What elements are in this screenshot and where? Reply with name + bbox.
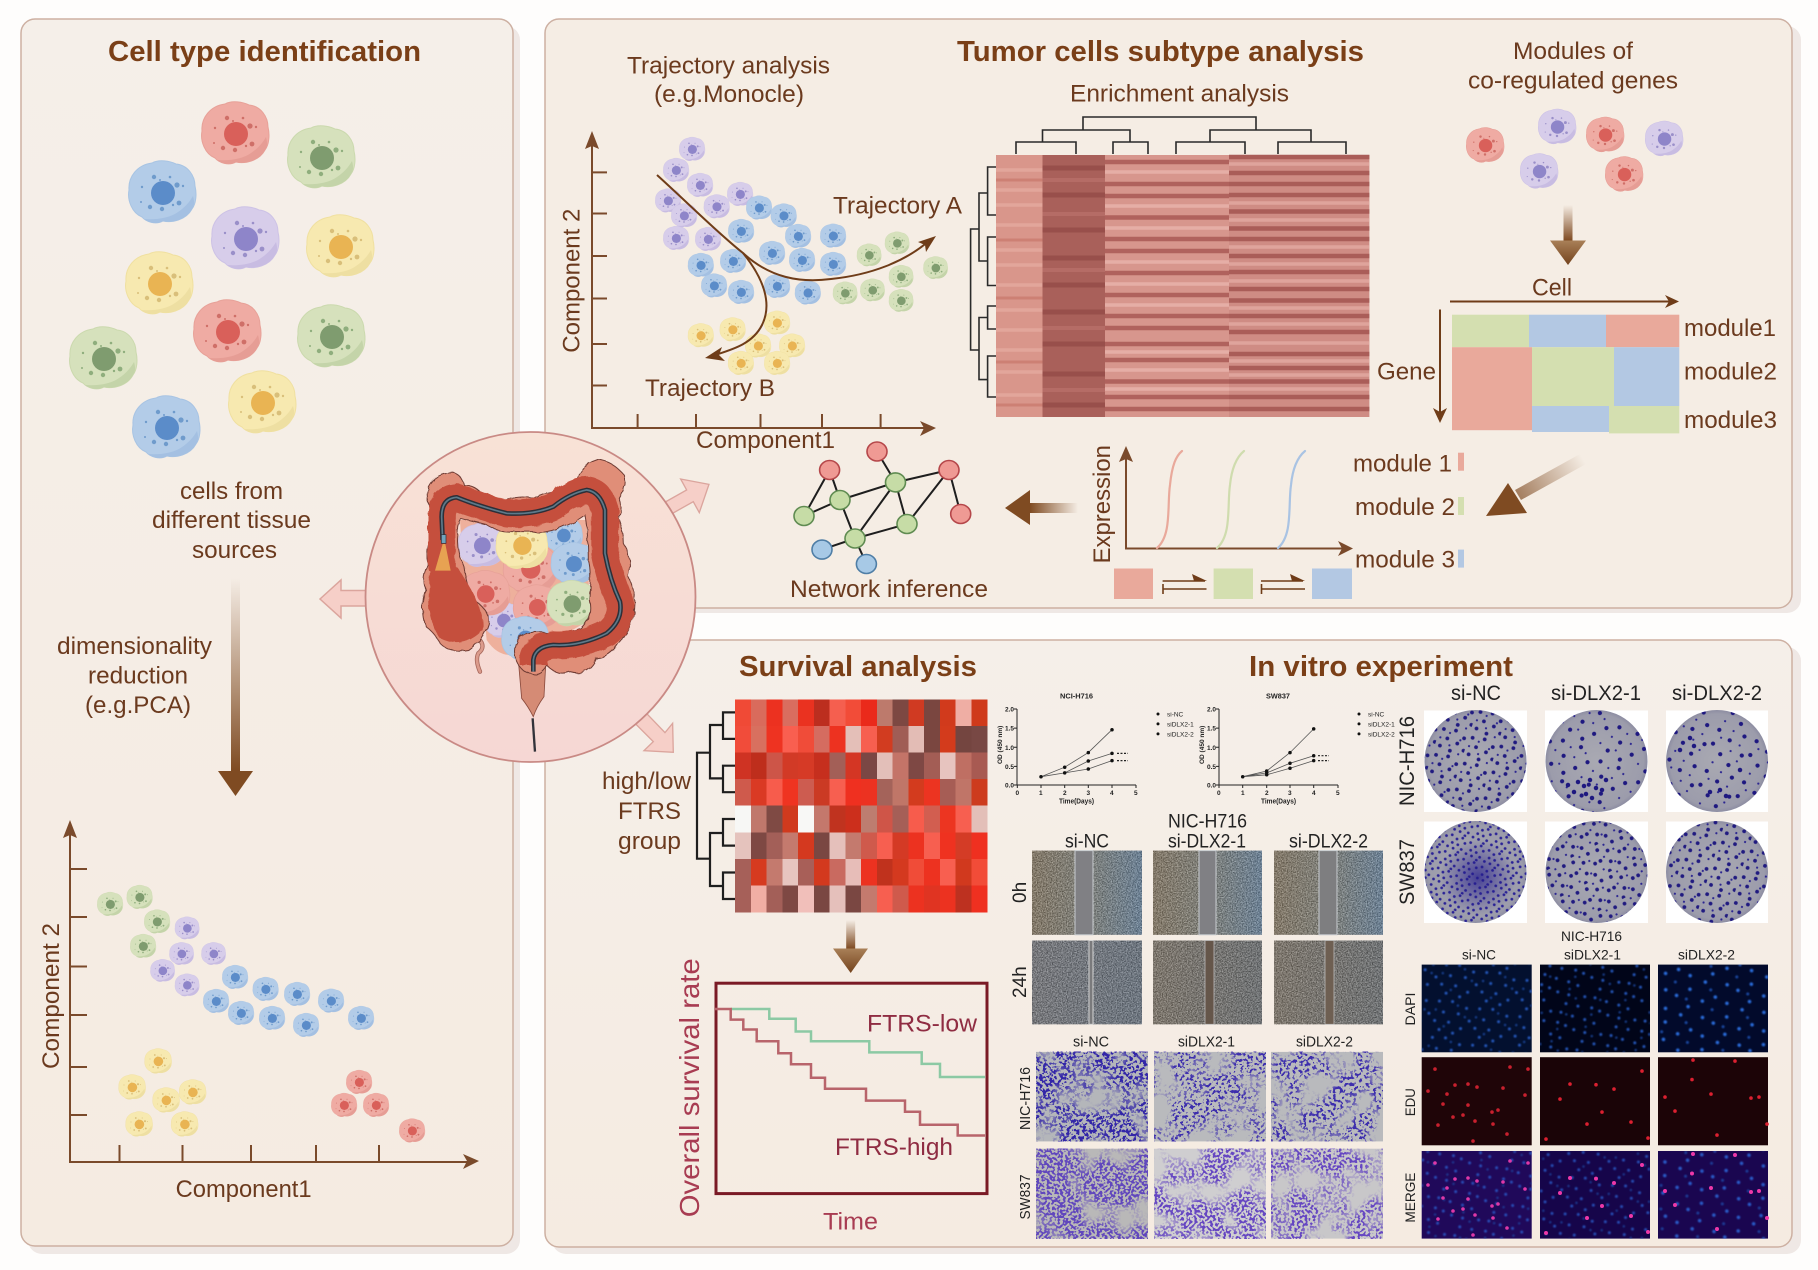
rectum	[518, 660, 546, 717]
colony row labels: NIC-H716	[1396, 716, 1419, 806]
trajectory curves	[657, 175, 936, 361]
tumor cell cluster	[458, 517, 597, 660]
wound healing assay	[1010, 812, 1383, 1024]
transwell images NIC-H716	[1036, 1052, 1383, 1141]
line chart: NCI-H716: Time(Days)	[1059, 798, 1094, 806]
fluorescence row labels: DAPI	[1402, 992, 1418, 1026]
caption: cells from different tissue sources: sources	[192, 537, 277, 564]
cell clusters	[97, 885, 425, 1142]
heatmap cells	[735, 699, 987, 912]
wound images 24h	[1032, 940, 1383, 1024]
y axis label: Component 2	[38, 923, 65, 1069]
line chart: NCI-H716: NCI-H716	[1060, 692, 1093, 700]
transwell column labels	[1073, 1034, 1353, 1050]
colony row labels: SW837	[1396, 839, 1419, 905]
line chart: SW837: 4	[1312, 790, 1316, 797]
wound column labels	[1065, 812, 1368, 852]
colony row labels	[1396, 716, 1419, 905]
colony plates	[1424, 710, 1768, 923]
label: dimensionality reduction: dimensionality	[57, 633, 212, 660]
label: enrichment analysis: Enrichment analysis	[1070, 80, 1289, 108]
module legend	[1353, 450, 1464, 573]
fluorescence row labels: MERGE	[1402, 1173, 1418, 1223]
wound column labels: si-DLX2-1	[1168, 832, 1246, 852]
line chart: SW837: OD (450 nm)	[1199, 726, 1206, 764]
arrow: to tumor subtype analysis	[660, 479, 709, 517]
line chart: NCI-H716: siDLX2-1	[1167, 721, 1194, 728]
line chart: NCI-H716: 4	[1110, 790, 1114, 797]
transwell column labels: si-NC	[1073, 1034, 1109, 1050]
transwell images SW837	[1036, 1149, 1383, 1239]
module row labels: module2	[1684, 358, 1777, 386]
wound row labels	[1010, 882, 1031, 998]
MERGE images	[1422, 1151, 1768, 1239]
line chart: SW837: 0	[1217, 790, 1221, 797]
x axis label: Component1	[176, 1176, 312, 1203]
wound column labels: NIC-H716	[1168, 812, 1247, 832]
axes	[1126, 456, 1344, 548]
module matrix	[1377, 274, 1777, 434]
line chart: NCI-H716: 0	[1016, 790, 1020, 797]
line chart: NCI-H716: 1	[1039, 790, 1043, 797]
fluorescence column labels	[1462, 928, 1735, 963]
line chart: NCI-H716: 2.0	[1005, 706, 1014, 714]
line chart: SW837: 2	[1265, 790, 1269, 797]
heatmap columns	[996, 155, 1369, 417]
FTRS-high curve	[715, 1009, 985, 1136]
fluorescence row labels	[1402, 992, 1418, 1223]
arrow: to cell type identification	[320, 580, 370, 618]
panel: cell type identification	[21, 19, 520, 1254]
arrow: to survival analysis	[630, 708, 673, 752]
line chart: SW837: 1.0	[1207, 745, 1216, 752]
label: modules of co-regulated genes	[1468, 38, 1678, 94]
transwell column labels: siDLX2-1	[1178, 1034, 1235, 1050]
label: trajectory analysis: Trajectory analysis	[627, 52, 830, 80]
line chart: SW837: 0.5	[1207, 764, 1216, 771]
transwell assay	[1017, 1034, 1383, 1239]
Kaplan-Meier survival chart	[674, 958, 987, 1236]
caption: cells from different tissue sources: cells from	[180, 478, 283, 505]
line chart: SW837	[1199, 692, 1395, 806]
x axis label: Component1	[696, 427, 835, 454]
arrow: expression to network	[1005, 490, 1078, 525]
network inference diagram	[794, 442, 971, 574]
FTRS-low curve	[731, 1009, 985, 1077]
wound images 0h	[1032, 851, 1383, 935]
PCA scatter plot	[38, 820, 479, 1203]
enrichment heatmap with dendrograms	[971, 117, 1369, 417]
line chart: SW837: 1.5	[1207, 726, 1216, 732]
line chart: SW837: 2.0	[1207, 706, 1216, 714]
y axis label: Component 2	[558, 209, 586, 353]
axes	[592, 140, 926, 428]
endoscope	[435, 490, 621, 752]
y axis label: Overall survival rate	[674, 958, 705, 1217]
module row labels: module3	[1684, 407, 1777, 434]
line chart: NCI-H716: 0.5	[1005, 764, 1014, 771]
label: modules of co-regulated genes: co-regulated genes	[1468, 68, 1678, 94]
row dendrogram	[971, 167, 996, 397]
x axis label: Time	[823, 1208, 878, 1236]
central circle: colon with endoscope	[320, 432, 709, 762]
line chart: NCI-H716	[997, 692, 1194, 806]
module legend: module 3	[1355, 546, 1455, 573]
line chart: SW837: 0.0	[1207, 782, 1216, 790]
transwell row labels: NIC-H716	[1017, 1067, 1034, 1130]
colony column labels	[1451, 682, 1762, 705]
line chart: SW837: 3	[1288, 790, 1292, 797]
label: trajectory B: Trajectory B	[645, 375, 775, 402]
wound row labels: 0h	[1010, 882, 1031, 903]
label: high/low FTRS group: high/low	[602, 768, 692, 795]
label: trajectory analysis: (e.g.Monocle)	[654, 81, 804, 108]
heading: tumor cells subtype analysis: Tumor cells subtype analysis	[957, 36, 1364, 68]
label: trajectory A: Trajectory A	[833, 192, 962, 220]
line chart: SW837: siDLX2-2	[1368, 731, 1395, 738]
colony column labels: si-DLX2-2	[1672, 682, 1762, 705]
trajectory plot	[558, 131, 962, 454]
EDU images	[1422, 1057, 1768, 1145]
caption: cells from different tissue sources	[152, 478, 311, 564]
co-regulated cells	[1466, 109, 1683, 191]
fluorescence column labels: siDLX2-1	[1564, 947, 1621, 963]
label: cell: Cell	[1532, 274, 1572, 302]
caption: cells from different tissue sources: different tissue	[152, 507, 311, 534]
heading: cell type identification: Cell type identification	[108, 36, 421, 68]
label: gene: Gene	[1377, 358, 1436, 386]
label: modules of co-regulated genes: Modules of	[1513, 38, 1633, 65]
line chart: NCI-H716: 5	[1134, 790, 1138, 797]
label: trajectory analysis	[627, 52, 830, 108]
axes	[70, 830, 470, 1162]
plot frame	[716, 983, 987, 1194]
FTRS heatmap	[697, 699, 987, 912]
line chart: NCI-H716: OD (450 nm)	[997, 726, 1004, 764]
wound row labels: 24h	[1010, 966, 1031, 998]
line chart: NCI-H716: si-NC	[1167, 712, 1184, 718]
expression curves	[1157, 451, 1305, 548]
transwell row labels: SW837	[1017, 1174, 1034, 1220]
panel: survival analysis and in vitro experiment	[320, 432, 1801, 1254]
line chart: SW837: siDLX2-1	[1368, 721, 1395, 728]
line chart: SW837: 5	[1336, 790, 1340, 797]
line chart: SW837: si-NC	[1368, 712, 1385, 718]
cells from different tissue sources	[70, 102, 374, 458]
module legend: module 1	[1353, 450, 1452, 477]
arrow: matrix to expression	[1486, 454, 1586, 516]
label: FTRS-low: FTRS-low	[867, 1010, 978, 1038]
label: FTRS-high: FTRS-high	[835, 1134, 953, 1161]
line chart: NCI-H716: 1.0	[1005, 745, 1014, 752]
label: dimensionality reduction	[57, 633, 212, 719]
line chart: SW837: Time(Days)	[1261, 798, 1296, 806]
heading: in vitro experiment: In vitro experiment	[1249, 651, 1513, 683]
gene axis arrow	[1433, 310, 1447, 423]
expression plot	[1089, 445, 1353, 599]
label: network inference: Network inference	[790, 576, 988, 603]
colony formation assay	[1396, 682, 1768, 923]
module legend: module 2	[1355, 494, 1455, 521]
module row labels	[1684, 315, 1777, 434]
heatmap dendrogram	[697, 712, 735, 899]
immunofluorescence EdU assay	[1402, 928, 1768, 1239]
cell axis arrow	[1450, 295, 1679, 308]
transwell row labels	[1017, 1067, 1034, 1220]
module transition squares	[1114, 568, 1352, 599]
line chart: SW837: SW837	[1266, 692, 1290, 700]
fluorescence column labels: NIC-H716	[1561, 928, 1622, 944]
label: dimensionality reduction: (e.g.PCA)	[85, 692, 191, 719]
column dendrogram	[1016, 117, 1346, 154]
colony column labels: si-NC	[1451, 682, 1501, 705]
wound column labels: si-DLX2-2	[1289, 832, 1368, 852]
arrow: heatmap to survival curve	[833, 920, 868, 973]
transwell column labels: siDLX2-2	[1296, 1034, 1353, 1050]
fluorescence column labels: siDLX2-2	[1678, 947, 1735, 963]
colon illustration	[423, 460, 635, 752]
label: high/low FTRS group: FTRS	[618, 798, 681, 825]
fluorescence column labels: si-NC	[1462, 947, 1496, 963]
y axis label: Expression	[1089, 445, 1116, 564]
module row labels: module1	[1684, 315, 1776, 342]
cell trajectory points	[655, 137, 948, 375]
arrow: dimensionality reduction	[218, 578, 253, 796]
DAPI images	[1422, 965, 1768, 1052]
appendix	[477, 638, 482, 672]
heading: survival analysis: Survival analysis	[739, 651, 977, 683]
line chart: NCI-H716: 2	[1063, 790, 1067, 797]
panel: tumor cells subtype analysis	[545, 19, 1801, 613]
wound column labels: si-NC	[1065, 832, 1109, 852]
line chart: NCI-H716: siDLX2-2	[1167, 731, 1194, 738]
line chart: SW837: 1	[1241, 790, 1245, 797]
label: high/low FTRS group: group	[618, 828, 681, 855]
label: dimensionality reduction: reduction	[88, 662, 188, 690]
line chart: NCI-H716: 3	[1086, 790, 1090, 797]
label: high/low FTRS group	[602, 768, 692, 855]
line chart: NCI-H716: 1.5	[1005, 726, 1014, 732]
colon wall	[423, 460, 635, 674]
colony column labels: si-DLX2-1	[1551, 682, 1641, 705]
line chart: NCI-H716: 0.0	[1005, 782, 1014, 790]
fluorescence row labels: EDU	[1402, 1088, 1418, 1116]
arrow: cells to module matrix	[1550, 205, 1586, 265]
circle background	[366, 432, 696, 762]
colored blocks	[1452, 315, 1679, 433]
